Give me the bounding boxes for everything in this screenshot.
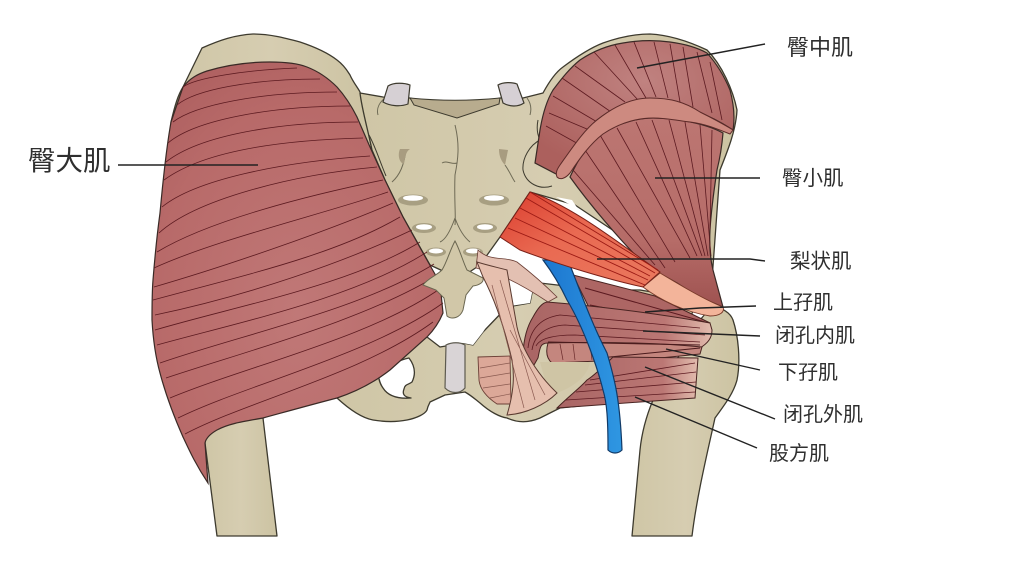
sacrospinous ligament <box>476 250 557 302</box>
left femur <box>205 395 277 536</box>
gluteus minimus fibres <box>573 120 712 268</box>
gluteus medius muscle <box>535 41 734 179</box>
quadratus femoris muscle <box>557 357 698 408</box>
sacrum details <box>369 98 552 242</box>
upper sacral foramen grooves <box>399 149 410 164</box>
gluteus minimus muscle <box>570 118 723 307</box>
coccyx <box>423 241 483 318</box>
sacral ala caps <box>383 83 410 106</box>
label: superior gemellus: 上孖肌 <box>773 291 833 314</box>
sacrotuberous ligament <box>477 262 557 415</box>
label: inferior gemellus: 下孖肌 <box>778 362 838 384</box>
sacral alar marks <box>377 98 531 115</box>
label leader lines <box>118 44 775 448</box>
obturator internus muscle <box>523 302 712 365</box>
pubic and ischial bone <box>337 283 700 422</box>
left ilium <box>170 34 372 200</box>
gluteus medius tendon band <box>556 98 733 179</box>
pubic symphysis <box>445 343 465 392</box>
sacral foramina <box>398 194 509 256</box>
label: gluteus minimus: 臀小肌 <box>782 167 844 190</box>
piriformis muscle <box>500 192 723 316</box>
piriformis tendon <box>643 273 723 316</box>
gluteus maximus muscle <box>152 62 443 483</box>
sacrum and right ilium <box>360 34 737 280</box>
sacral midline <box>440 125 470 242</box>
label: gluteus maximus: 臀大肌 <box>28 145 110 176</box>
label: quadratus femoris: 股方肌 <box>769 442 829 465</box>
inferior gemellus muscle <box>547 342 702 363</box>
label: obturator externus: 闭孔外肌 <box>783 403 863 426</box>
label: obturator internus: 闭孔内肌 <box>775 324 855 347</box>
label: gluteus medius: 臀中肌 <box>787 35 853 60</box>
superior sacral plate <box>410 98 500 118</box>
gluteus medius fibres <box>546 42 722 146</box>
pelvis and femur bones <box>170 34 739 536</box>
gluteus maximus fibres <box>153 68 443 434</box>
blue sciatic nerve <box>543 260 622 453</box>
superior gemellus muscle <box>573 275 710 330</box>
ischial bone patch <box>540 362 590 393</box>
label: piriformis: 梨状肌 <box>790 250 852 273</box>
white gaps in pelvis <box>436 197 712 345</box>
obturator externus muscle <box>478 356 511 404</box>
right femur and trochanter <box>632 306 739 536</box>
obturator foramen <box>378 358 414 398</box>
